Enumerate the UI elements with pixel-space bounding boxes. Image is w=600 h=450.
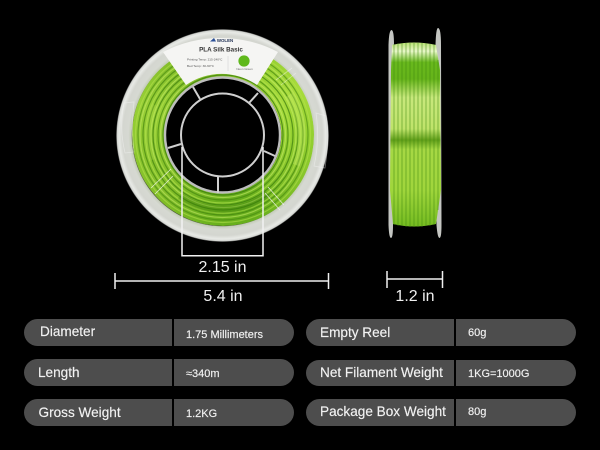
width value: 1.2 in bbox=[395, 288, 435, 305]
spec row: net filament weight bbox=[306, 360, 576, 386]
spool label: PLA Silk Basic bbox=[199, 46, 243, 54]
spec row: length: ≈340m bbox=[186, 368, 220, 380]
reel details bbox=[122, 68, 328, 210]
spec row: diameter bbox=[24, 319, 294, 346]
outer diameter dimension line bbox=[114, 273, 330, 289]
inner diameter value: 2.15 in bbox=[198, 259, 247, 276]
inner diameter bracket bbox=[181, 147, 264, 256]
spec row: empty reel bbox=[306, 319, 576, 346]
filament winding bbox=[390, 42, 441, 227]
spec row: diameter: Diameter bbox=[40, 324, 95, 339]
spool label: Neon Green bbox=[236, 67, 253, 71]
left flange bbox=[388, 30, 394, 238]
spec row: net filament weight: 1KG=1000G bbox=[468, 368, 529, 380]
spec row: net filament weight: Net Filament Weight bbox=[320, 365, 443, 380]
spec row: length: Length bbox=[38, 365, 80, 380]
spec row: diameter: 1.75 Millimeters bbox=[186, 329, 263, 341]
spec row: gross weight: Gross Weight bbox=[38, 405, 121, 420]
spool label: WOLEN bbox=[217, 38, 233, 43]
spec row: package box weight: 80g bbox=[468, 406, 486, 418]
spec row: package box weight bbox=[306, 399, 576, 426]
side view of filament spool bbox=[388, 28, 442, 238]
outer diameter value: 5.4 in bbox=[203, 288, 243, 305]
right flange bbox=[436, 28, 442, 238]
spec row: empty reel: 60g bbox=[468, 327, 486, 339]
spool label: Bed Temp: 30-60°C bbox=[187, 64, 215, 68]
front view of filament spool bbox=[116, 29, 329, 242]
spec row: package box weight: Package Box Weight bbox=[320, 404, 446, 419]
spec row: length bbox=[24, 359, 294, 386]
hub rings and spokes bbox=[165, 78, 280, 193]
spec row: gross weight: 1.2KG bbox=[186, 408, 217, 420]
width dimension line bbox=[386, 271, 444, 288]
spec row: gross weight bbox=[24, 399, 294, 426]
spec row: empty reel: Empty Reel bbox=[320, 325, 390, 340]
spool label bbox=[163, 38, 278, 85]
spool label: Printing Temp: 215-240°C bbox=[187, 58, 223, 62]
